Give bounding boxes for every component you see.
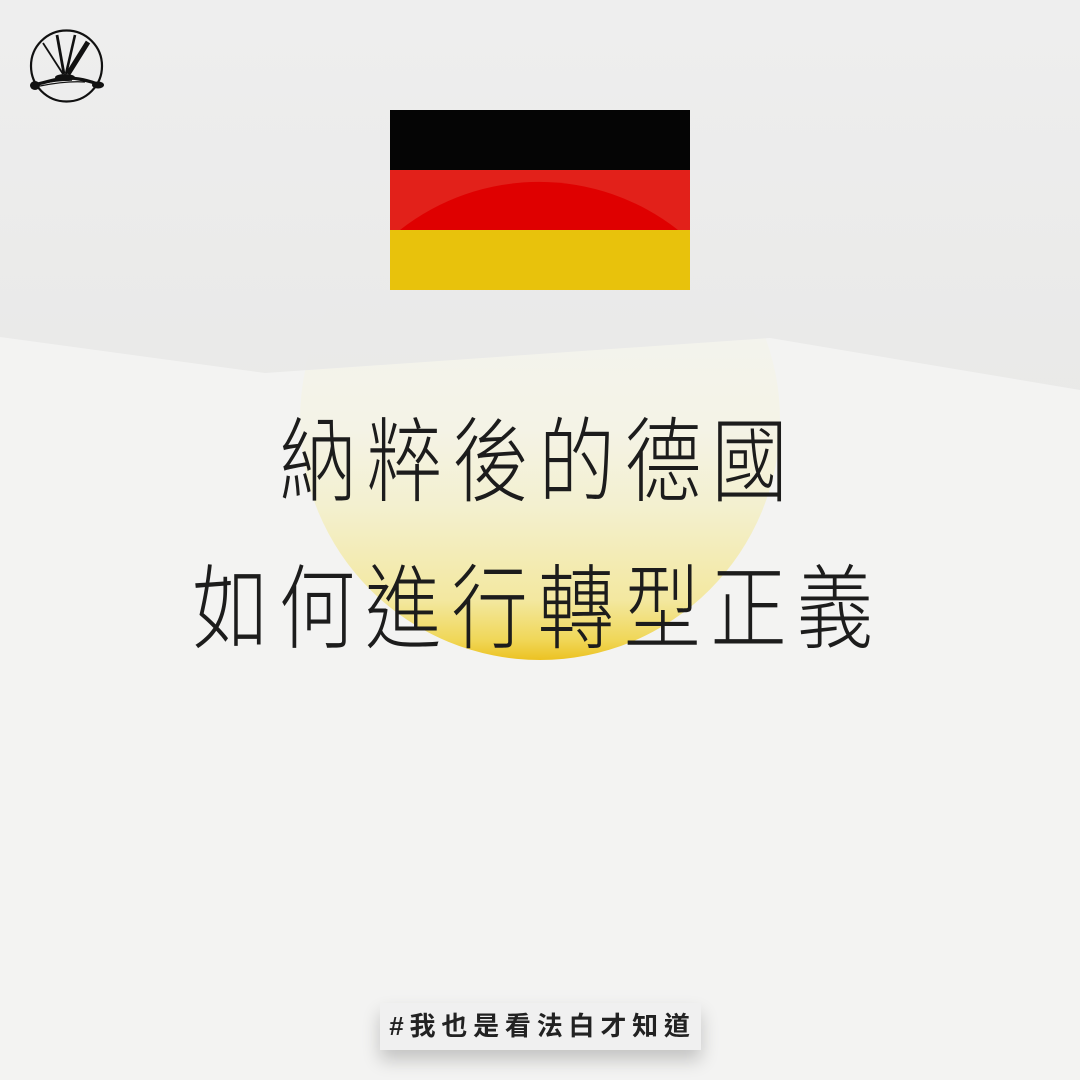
upper background panel — [0, 0, 1080, 390]
flag of Germany — [390, 110, 690, 290]
hashtag label — [380, 1003, 701, 1050]
sun circle — [300, 180, 780, 660]
hashtag label: #我也是看法白才知道 — [389, 1011, 696, 1041]
logo — [30, 30, 104, 102]
title line 1: 納粹後的德國 — [280, 412, 798, 514]
title line 2: 如何進行轉型正義 — [192, 559, 883, 661]
